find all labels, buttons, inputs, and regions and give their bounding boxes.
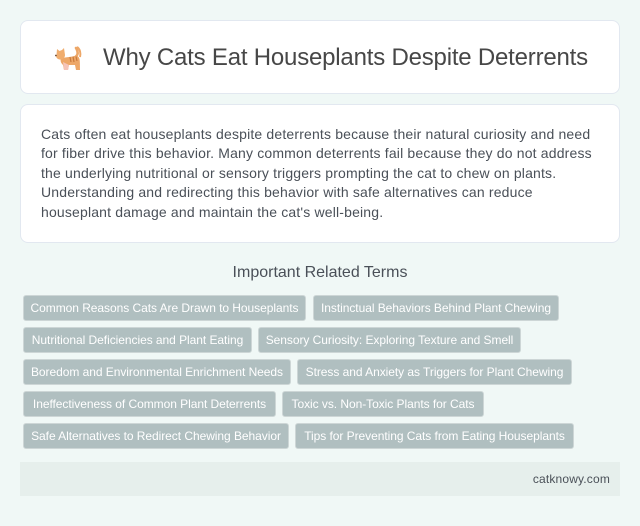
panel: description <box>20 104 620 243</box>
title text: Why Cats Eat Houseplants Despite Deterrents <box>103 44 588 71</box>
related term tags: Boredom and Environmental Enrichment Needs <box>31 365 283 379</box>
related term tags: Safe Alternatives to Redirect Chewing Behavior <box>31 429 281 443</box>
related term tags: Sensory Curiosity: Exploring Texture and Smell <box>266 333 513 347</box>
description text: houseplant damage and maintain the cat's well-being. <box>41 204 383 220</box>
related term tags: Toxic vs. Non-Toxic Plants for Cats <box>292 397 474 411</box>
description text: Cats often eat houseplants despite deterrents because their natural curiosity and need <box>41 126 590 142</box>
description text: the underlying nutritional or sensory triggers prompting the cat to chew on plants. <box>41 165 556 181</box>
description text: Understanding and redirecting this behavior with safe alternatives can reduce <box>41 184 533 200</box>
heading: related terms: Important Related Terms <box>233 264 407 281</box>
description text <box>41 126 592 220</box>
related term tags: Ineffectiveness of Common Plant Deterrents <box>33 397 266 411</box>
description text: for fiber drive this behavior. Many common deterrents fail because they do not address <box>41 145 592 161</box>
related term tags: Stress and Anxiety as Triggers for Plant Chewing <box>306 365 563 379</box>
footer bar <box>20 462 620 496</box>
related term tags: Tips for Preventing Cats from Eating Houseplants <box>304 429 565 443</box>
related term tags: Instinctual Behaviors Behind Plant Chewing <box>321 301 551 315</box>
title card <box>20 20 620 94</box>
related term tags: Nutritional Deficiencies and Plant Eating <box>32 333 243 347</box>
related term tags: Common Reasons Cats Are Drawn to Houseplants <box>31 301 298 315</box>
icon: cat <box>55 46 82 70</box>
related term tags <box>23 295 574 449</box>
footer site name: catknowy.com <box>533 472 610 486</box>
